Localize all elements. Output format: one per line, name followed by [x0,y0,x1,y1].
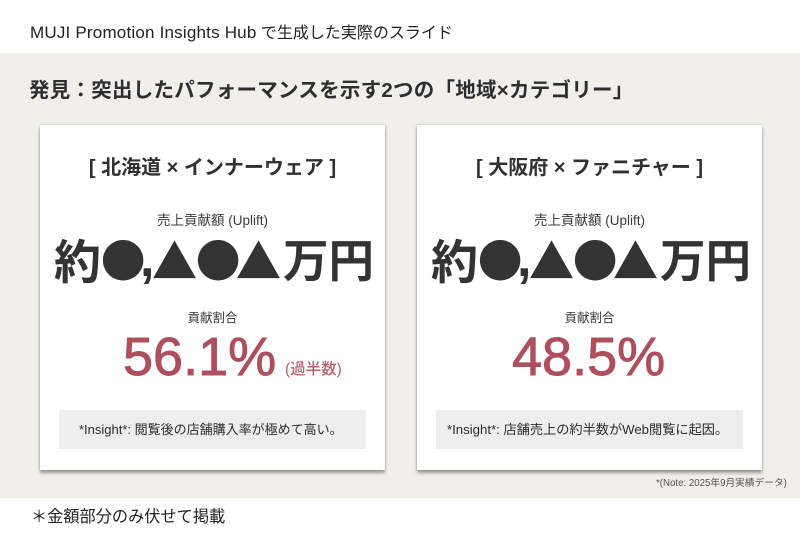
amount: , [517,230,531,288]
amount: 万円 [660,236,751,287]
label: share: 貢献割合 [564,311,614,325]
panel: Hokkaido innerwear [40,125,385,470]
amount [431,226,751,289]
amount: 約 [431,236,478,289]
amount [54,226,374,289]
data note: *(Note: 2025年9月実績データ) [656,478,787,489]
insight box: *Insight*: 店舗売上の約半数がWeb閲覧に起因。 [447,422,728,437]
amount: ● [100,226,146,287]
amount: 約 [54,236,101,289]
percentage: 48.5% [512,327,665,387]
amount: ▲ [237,227,280,284]
amount: , [140,230,154,288]
panel title: [ 大阪府 × ファニチャー ] [476,157,703,179]
heading: 発見：突出したパフォーマンスを示す2つの「地域×カテゴリー」 [29,79,633,102]
amount: ● [195,226,241,287]
caption: top: MUJI Promotion Insights Hub で生成した実際のスライド [30,23,453,42]
insight box [59,410,366,449]
amount: ▲ [153,227,196,284]
caption: bottom: ＊金額部分のみ伏せて掲載 [31,508,225,526]
amount: ▲ [530,227,573,284]
insight box: *Insight*: 閲覧後の店舗購入率が極めて高い。 [79,422,343,437]
note: majority: (過半数) [285,361,342,378]
insight box [436,410,743,449]
amount: 万円 [283,236,374,287]
panel title: [ 北海道 × インナーウェア ] [89,157,336,179]
amount: ● [572,226,618,287]
percentage: 56.1% [123,327,276,387]
panel: Osaka furniture [417,125,762,470]
label: share: 貢献割合 [187,311,238,325]
amount: ▲ [614,227,657,284]
label: uplift: 売上貢献額 (Uplift) [534,213,645,228]
label: uplift: 売上貢献額 (Uplift) [157,213,268,228]
amount: ● [477,226,523,287]
